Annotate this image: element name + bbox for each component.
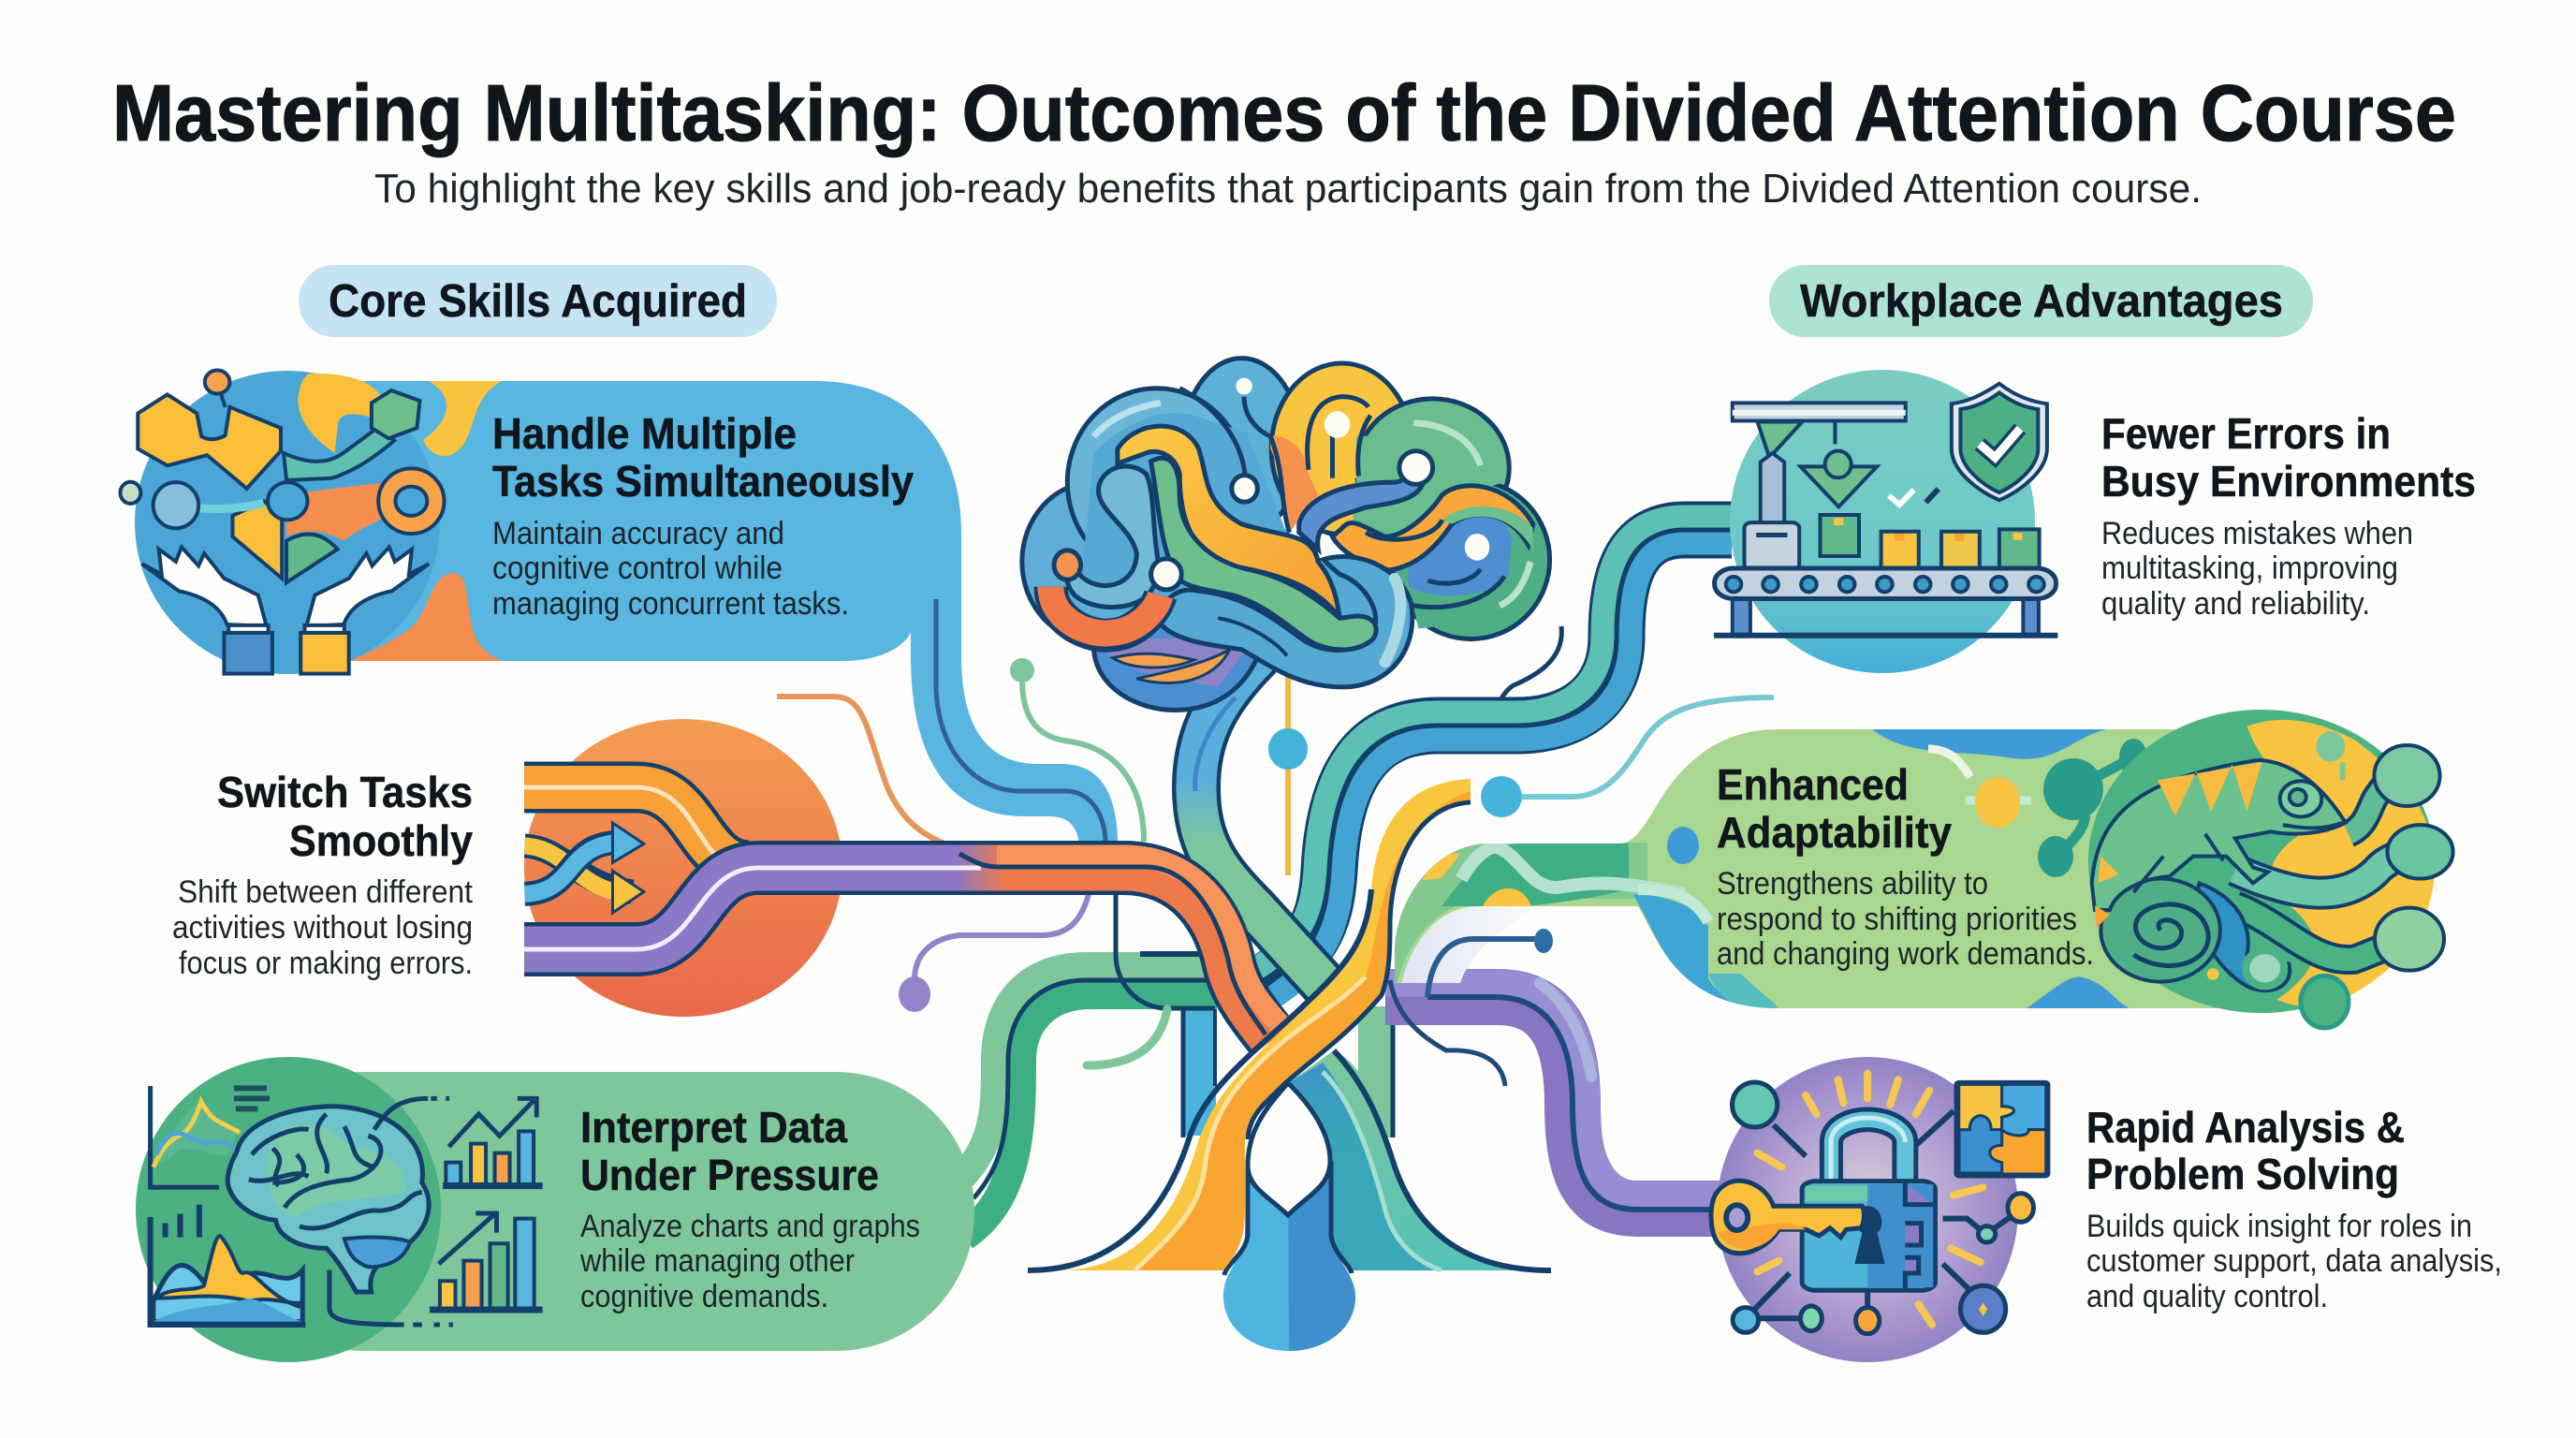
panel: rapid analysis: and quality control. — [2086, 1279, 2328, 1314]
backing fill hiding inner outlines — [1079, 413, 1395, 679]
blue dot — [1667, 827, 1699, 864]
panel: rapid analysis: Problem Solving — [2086, 1150, 2399, 1198]
band: purple to rapid analysis — [1385, 983, 1732, 1210]
heading: Interpret Data — [580, 1103, 847, 1152]
upper bar chart — [443, 1098, 543, 1186]
heading: Rapid Analysis & — [2086, 1103, 2405, 1152]
body text: Reduces mistakes when — [2101, 516, 2413, 551]
heading: Handle Multiple — [492, 409, 797, 458]
panel: enhanced adaptability: respond to shifting priorities — [1717, 902, 2077, 937]
body text: Analyze charts and graphs — [580, 1209, 920, 1244]
left swirl — [1067, 466, 1161, 608]
icon: crossing arrows — [525, 823, 644, 913]
connector tail — [955, 889, 1217, 1236]
connector: purple thin line — [899, 894, 1089, 1012]
pill with connector tail — [337, 381, 1118, 844]
tentacles — [2235, 775, 2421, 960]
icon circle — [1730, 370, 2035, 673]
panel body with waves — [1385, 721, 2237, 1020]
chameleon circle — [2088, 710, 2435, 1013]
section heading: workplace advantages: Workplace Advantages — [1800, 276, 2283, 327]
title: Mastering Multitasking: Outcomes of the Divided Attention Course — [112, 69, 2456, 158]
icon: brain with charts — [151, 1086, 543, 1325]
panel: handle multiple tasks: cognitive control while — [492, 550, 783, 586]
band: teal double ribbon to factory — [1240, 517, 1732, 1006]
body text: Shift between different — [178, 874, 474, 910]
section heading: workplace advantages — [1769, 265, 2313, 337]
icon: factory conveyor and shield — [1714, 384, 2057, 636]
panel: handle multiple tasks: Tasks Simultaneously — [492, 457, 914, 506]
icon: chameleon — [2092, 720, 2453, 1028]
panel: rapid analysis: customer support, data analysis, — [2086, 1243, 2502, 1279]
panel: switch tasks smoothly — [172, 719, 1039, 1017]
pale cut-out gradient — [1401, 906, 1544, 983]
band: orange ribbon crossing — [959, 854, 1281, 1039]
panel: switch tasks smoothly: focus or making errors. — [179, 946, 473, 981]
orange yellow right band — [1332, 486, 1533, 570]
panel: interpret data under pressure: cognitive demands. — [580, 1279, 828, 1314]
brain — [227, 1107, 429, 1292]
connector: yellow vertical line with blue node — [1268, 669, 1308, 875]
highlights — [1413, 423, 1530, 606]
panel: switch tasks smoothly: Smoothly — [289, 816, 473, 865]
heading: Fewer Errors in — [2101, 409, 2391, 458]
tail spiral — [2133, 904, 2208, 966]
panel: handle multiple tasks — [120, 371, 1118, 844]
key — [1711, 1181, 1864, 1254]
pill — [225, 1072, 974, 1351]
lower lobe — [1093, 616, 1261, 710]
heading: Switch Tasks — [217, 768, 473, 816]
lower bar chart — [430, 1213, 543, 1310]
tail detail line — [936, 599, 1105, 844]
section heading: core skills — [299, 265, 777, 337]
band: central trunk blue to green — [1195, 655, 1353, 1016]
panel: fewer errors: Busy Environments — [2101, 457, 2476, 506]
panel: fewer errors: quality and reliability. — [2101, 586, 2370, 622]
band: yellow ribbon crossing — [1028, 779, 1471, 1270]
lock body — [1802, 1181, 1935, 1290]
panel: interpret data under pressure: Under Pressure — [580, 1151, 879, 1199]
brain — [1022, 359, 1550, 710]
panel: enhanced adaptability — [1385, 710, 2453, 1028]
shackle — [1822, 1109, 1916, 1182]
connector: dark lines to rapid analysis — [1390, 929, 1553, 1086]
icon: puzzle brain with hands — [120, 371, 445, 674]
panel: handle multiple tasks: managing concurrent tasks. — [492, 586, 849, 622]
body — [2092, 760, 2346, 910]
panel: switch tasks smoothly: activities without losing — [172, 910, 473, 946]
body text: Maintain accuracy and — [492, 516, 784, 551]
panel: rapid analysis — [1711, 1057, 2502, 1362]
molecule decoration — [2038, 739, 2147, 877]
band: orange upper ribbon — [524, 787, 749, 866]
heading: Enhanced — [1717, 760, 1909, 809]
icon circle — [1717, 1057, 2018, 1362]
panel: fewer errors — [1714, 370, 2476, 673]
green swoosh — [1151, 458, 1376, 650]
orange circle — [524, 719, 842, 1017]
subtitle: To highlight the key skills and job-ready benefits that participants gain from the Divided Attention course. — [374, 166, 2202, 212]
bottom blue lobe — [1158, 556, 1412, 687]
section heading: core skills: Core Skills Acquired — [329, 276, 747, 327]
yellow blob — [423, 381, 502, 456]
panel: enhanced adaptability: and changing work demands. — [1717, 936, 2094, 972]
connector: teal thin line — [1481, 697, 1774, 817]
orange arc — [1050, 587, 1161, 636]
connector: orange thin line — [777, 697, 955, 847]
body text: Strengthens ability to — [1717, 866, 1988, 902]
panel: fewer errors: multitasking, improving — [2101, 550, 2398, 586]
band: purple lower ribbon into orange — [524, 868, 1039, 949]
blue ribbon to node — [1299, 474, 1423, 550]
panel: enhanced adaptability: Adaptability — [1717, 808, 1952, 857]
icon circle — [136, 1057, 441, 1362]
connector: dark thin line to factory — [1471, 626, 1561, 723]
white nodes — [1236, 378, 1252, 394]
puzzle — [1957, 1083, 2047, 1175]
icon: lock, key and puzzle — [1711, 1074, 2047, 1334]
panel: interpret data under pressure: while managing other — [579, 1243, 855, 1279]
vertical back strips — [1183, 983, 1393, 1137]
orange blob — [349, 573, 503, 661]
droplet — [1223, 1083, 1355, 1351]
connector: green thin line — [1010, 658, 1144, 842]
keyhole — [1854, 1206, 1885, 1264]
outer lobes — [1182, 359, 1301, 536]
icon circle — [135, 371, 440, 674]
tail disc — [2100, 879, 2220, 982]
body text: Builds quick insight for roles in — [2086, 1209, 2472, 1244]
yellow swoosh — [1118, 426, 1339, 618]
panel: interpret data under pressure — [136, 889, 1217, 1362]
fan base: teal right — [1288, 1050, 1551, 1270]
lobe separators — [1179, 389, 1370, 533]
